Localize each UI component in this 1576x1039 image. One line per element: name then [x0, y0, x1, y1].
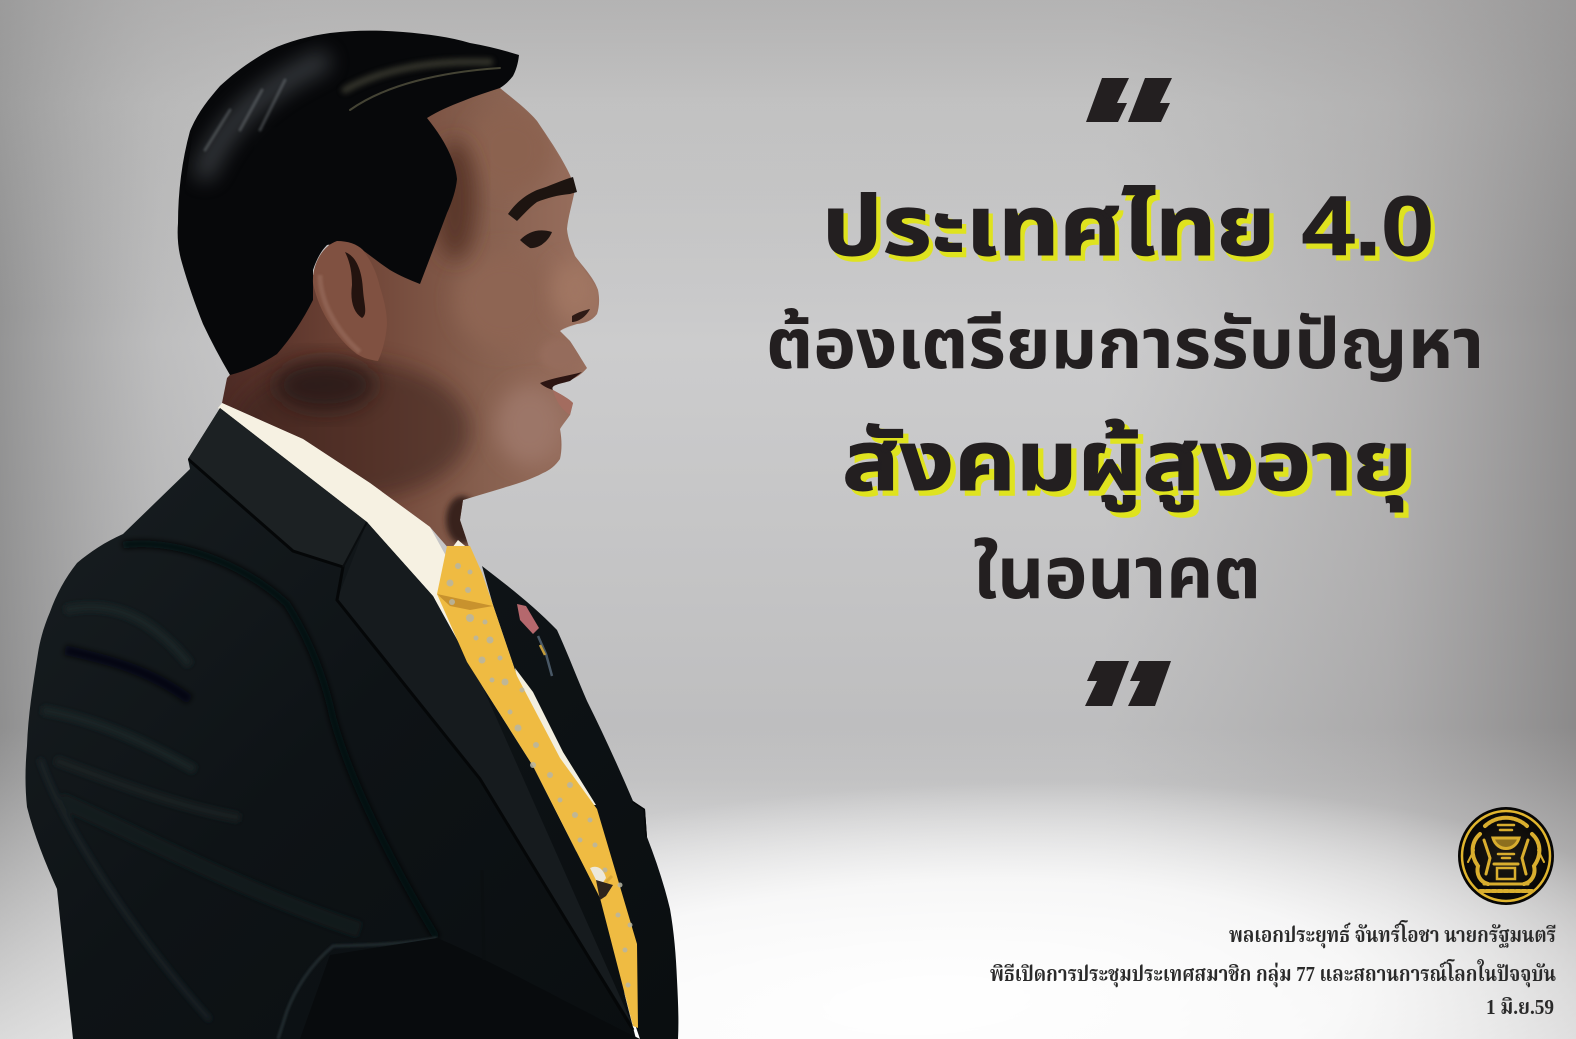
shirt collar [218, 403, 500, 690]
portrait: man in profile [26, 31, 678, 1039]
eyebrow [508, 177, 577, 221]
neck and face [222, 88, 599, 550]
tie knot crease [437, 594, 493, 610]
tie clip emblem [590, 867, 613, 900]
headline: aged society: สังคมผู้สูงอายุ [847, 419, 1417, 517]
suit jacket [26, 408, 678, 1039]
nostril [572, 309, 590, 322]
lapel pin [517, 604, 552, 676]
closing quotation mark [1085, 661, 1171, 706]
necktie [437, 546, 638, 1028]
mouth [540, 372, 582, 390]
shirt sliver beside tie [515, 668, 596, 805]
hair [178, 31, 519, 375]
ear [313, 241, 387, 361]
face shading [230, 108, 599, 544]
lapel and jacket folds [40, 408, 647, 1039]
headline: aged society: สังคมผู้สูงอายุ [842, 414, 1412, 512]
opening quotation mark [1086, 78, 1172, 122]
tie pattern dots [446, 563, 632, 988]
headline: Thailand 4.0: ประเทศไทย 4.0 [822, 179, 1434, 273]
headline: Thailand 4.0: ประเทศไทย 4.0 [826, 184, 1438, 278]
eye [520, 230, 552, 248]
attribution text: 1 มิ.ย.59 [1486, 995, 1554, 1019]
government seal [1458, 807, 1554, 905]
hair sheen [205, 62, 500, 170]
lips tint [553, 390, 573, 415]
headline: in the future: ในอนาคต [973, 534, 1261, 614]
headline: must prepare for the problem: ต้องเตรียมการรับปัญหา [766, 305, 1484, 383]
attribution text [990, 920, 1556, 1019]
